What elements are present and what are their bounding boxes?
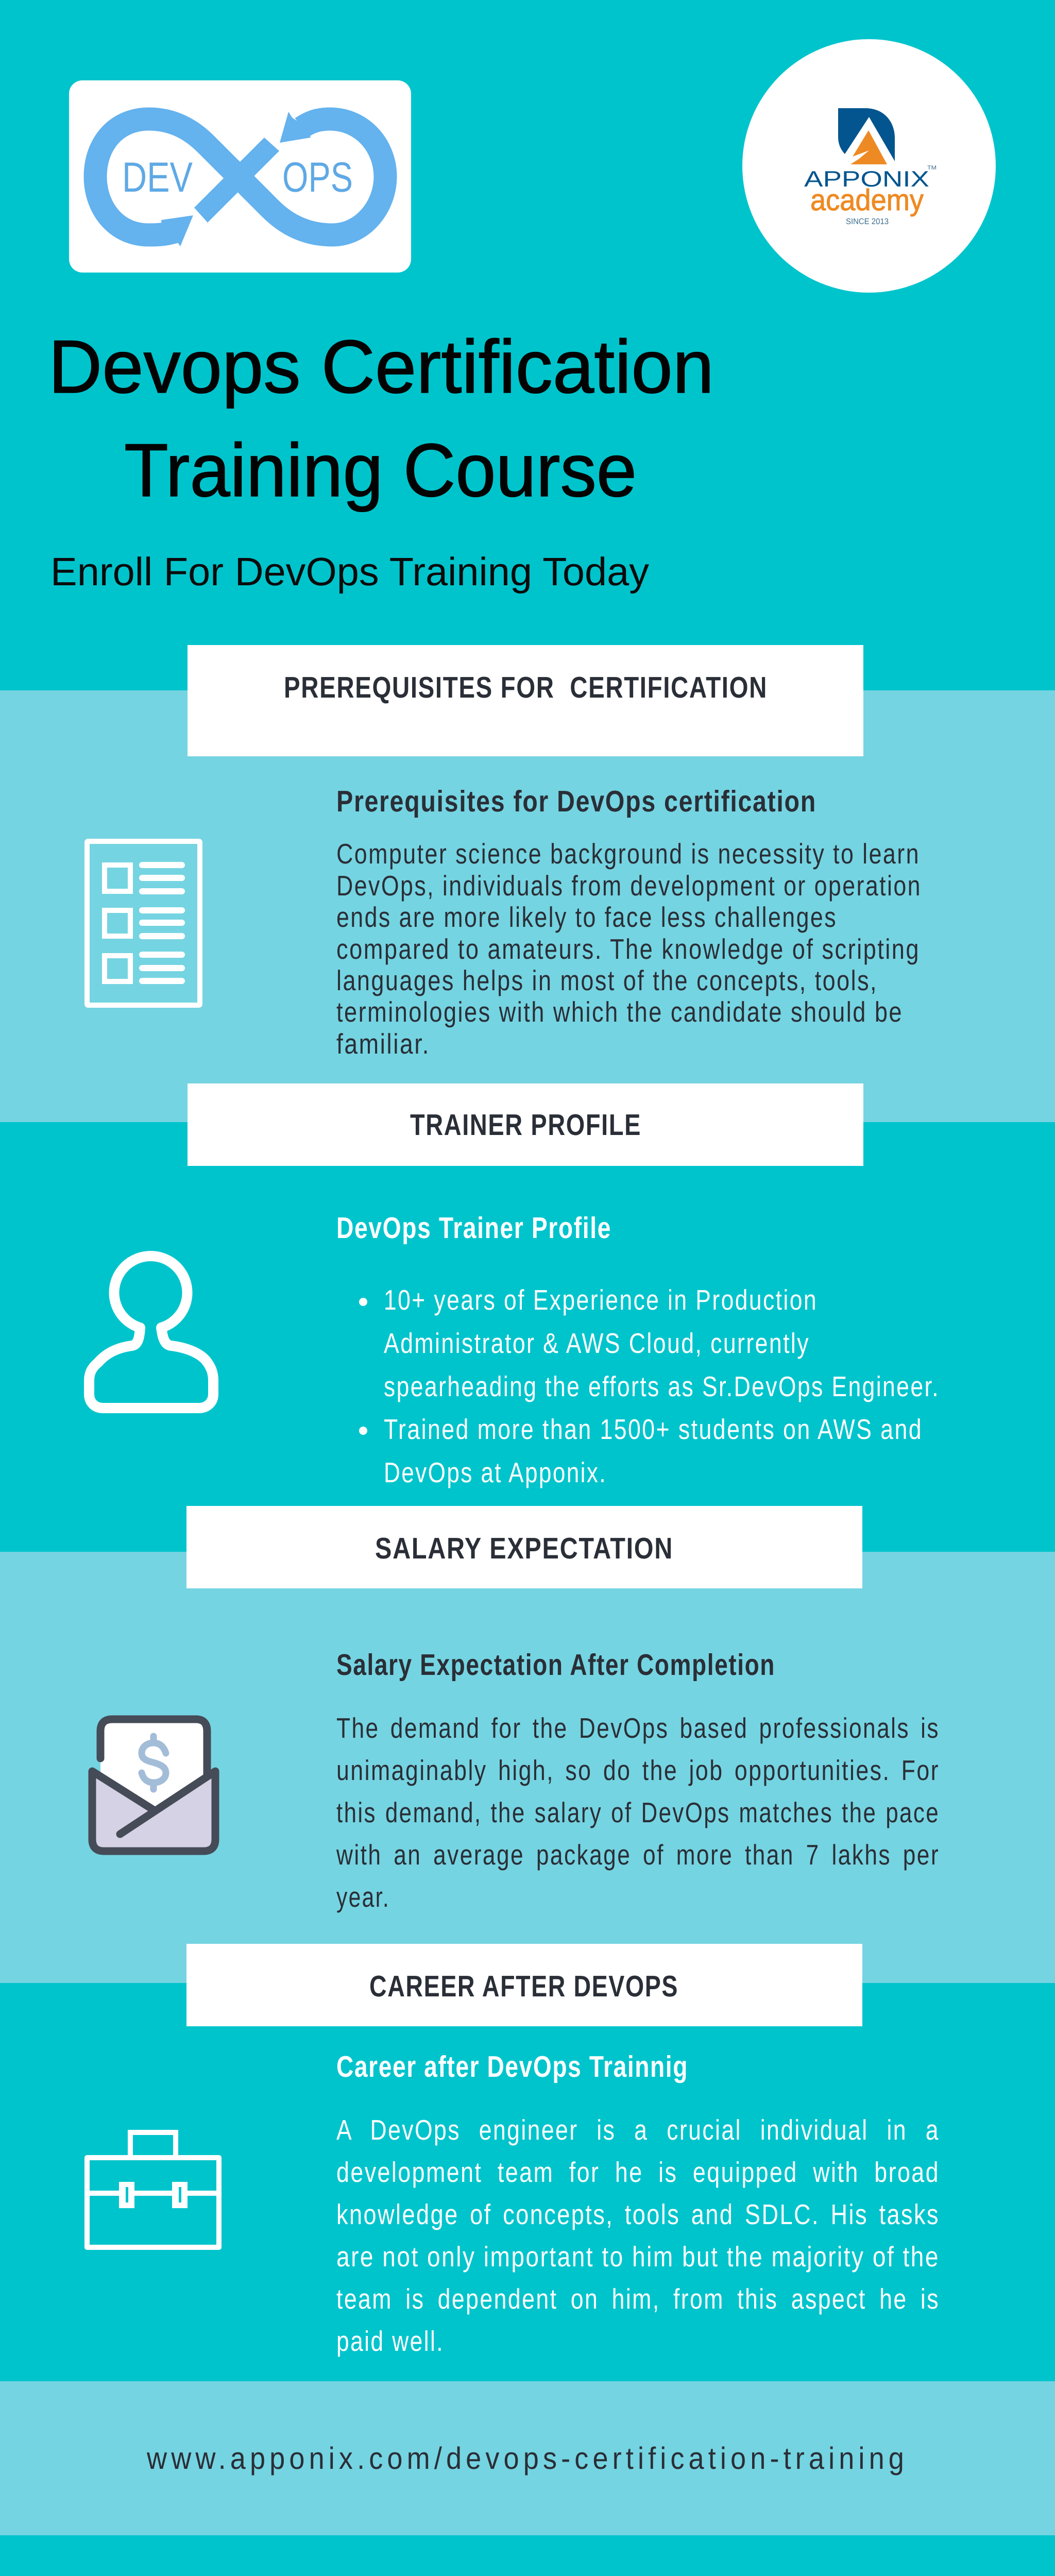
heading: career after devops xyxy=(186,1944,862,2026)
text block: prerequisites paragraph: Computer science background is necessity to learn xyxy=(336,838,920,870)
heading: prerequisites for certification xyxy=(188,645,863,756)
heading: career after devops: CAREER AFTER DEVOPS xyxy=(369,1970,678,2003)
text block: prerequisites paragraph: DevOps, individuals from development or operation xyxy=(336,870,922,902)
logo: Apponix academy circle badge: TM xyxy=(927,165,937,171)
text block: trainer bullets: 10+ years of Experience in Production xyxy=(384,1284,818,1316)
panel: prerequisites xyxy=(0,645,1055,1122)
text block: salary paragraph: year. xyxy=(336,1881,390,1913)
icon: checklist document xyxy=(87,841,200,1005)
text block: prerequisites paragraph: familiar. xyxy=(336,1028,430,1060)
text block: trainer bullets: DevOps at Apponix. xyxy=(384,1456,607,1488)
text block: trainer bullets: Trained more than 1500+ students on AWS and xyxy=(384,1413,923,1445)
text block: career paragraph xyxy=(336,2114,940,2357)
logo: DevOps infinity loop card xyxy=(69,80,411,273)
panel: footer website link xyxy=(0,2381,1055,2535)
text block: prerequisites paragraph: compared to amateurs. The knowledge of scripting xyxy=(336,933,920,965)
heading: trainer profile xyxy=(188,1083,863,1166)
heading: prerequisites for certification: PREREQUISITES FOR CERTIFICATION xyxy=(284,671,768,704)
text block: career paragraph: are not only important to him but the majority of the xyxy=(336,2241,940,2273)
logo: Apponix academy circle badge: APPONIX xyxy=(804,167,929,192)
text block: prerequisites paragraph: languages helps in most of the concepts, tools, xyxy=(336,964,878,996)
panel: trainer profile xyxy=(89,1083,940,1488)
text block: career paragraph: knowledge of concepts, tools and SDLC. His tasks xyxy=(336,2198,940,2230)
text block: career paragraph: paid well. xyxy=(336,2325,444,2357)
subheading: prerequisites: Prerequisites for DevOps certification xyxy=(336,785,816,818)
subheading: trainer: DevOps Trainer Profile xyxy=(336,1211,611,1245)
subheading: salary: Salary Expectation After Completion xyxy=(336,1648,775,1682)
text block: prerequisites paragraph: ends are more likely to face less challenges xyxy=(336,901,837,933)
text block: salary paragraph xyxy=(336,1712,940,1913)
logo: DevOps infinity loop card: DEV xyxy=(122,154,193,201)
icon: envelope with dollar xyxy=(92,1719,215,1851)
panel: salary expectation xyxy=(0,1506,1055,1983)
logo: Apponix academy circle badge: SINCE 2013 xyxy=(846,217,889,226)
text block: prerequisites paragraph: terminologies with which the candidate should be xyxy=(336,996,903,1028)
logo: Apponix academy circle badge xyxy=(742,39,996,293)
title: Devops Certification xyxy=(48,325,714,409)
title xyxy=(48,325,714,512)
icon: briefcase xyxy=(84,2132,222,2247)
logo: Apponix academy circle badge: academy xyxy=(810,183,924,217)
text block: trainer bullets: spearheading the efforts as Sr.DevOps Engineer. xyxy=(384,1370,940,1402)
subtitle: Enroll For DevOps Training Today xyxy=(50,550,649,594)
text block: prerequisites paragraph xyxy=(336,838,922,1060)
logo: DevOps infinity loop card: OPS xyxy=(282,154,353,201)
text block: trainer bullets xyxy=(359,1284,940,1488)
heading: salary expectation: SALARY EXPECTATION xyxy=(375,1532,673,1565)
icon: person outline xyxy=(89,1256,213,1408)
heading: salary expectation xyxy=(186,1506,862,1588)
panel: footer website link: www.apponix.com/devops-certification-training xyxy=(146,2441,908,2476)
heading: trainer profile: TRAINER PROFILE xyxy=(410,1108,641,1142)
text block: career paragraph: development team for he is equipped with broad xyxy=(336,2156,940,2188)
title: Training Course xyxy=(124,428,637,512)
subheading: career: Career after DevOps Trainnig xyxy=(336,2050,688,2083)
panel: career after devops xyxy=(84,1944,940,2357)
text block: trainer bullets: Administrator & AWS Cloud, currently xyxy=(384,1327,810,1359)
